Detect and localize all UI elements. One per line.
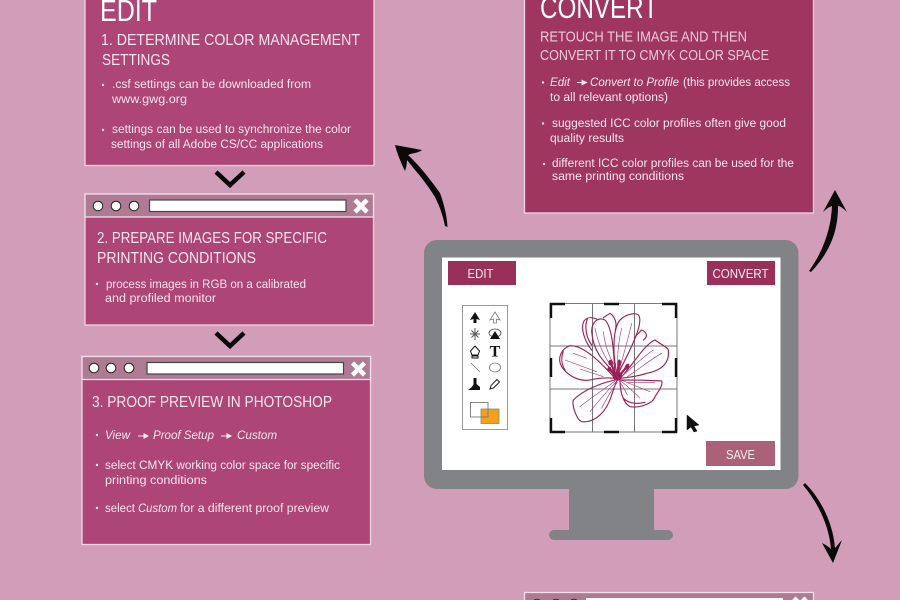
step 2 heading: 2. PREPARE IMAGES FOR SPECIFIC <box>97 230 327 247</box>
convert button <box>707 261 775 285</box>
convert subheading: CONVERT IT TO CMYK COLOR SPACE <box>540 47 769 64</box>
step 3 heading: 3. PROOF PREVIEW IN PHOTOSHOP <box>92 394 332 411</box>
icon: ellipse tool <box>490 363 500 372</box>
step 3 bullets <box>96 428 340 515</box>
toolbox panel <box>462 306 508 430</box>
window title bar <box>85 194 374 217</box>
arrow: chevron 2 to 3 <box>216 333 244 346</box>
step 3 bullets: Custom <box>237 428 277 442</box>
icon: pen tool <box>470 346 480 358</box>
step 2 bullet: and profiled monitor <box>105 291 216 305</box>
cursor <box>687 415 699 432</box>
icon: type tool: T <box>490 344 501 360</box>
panel: bottom window (cropped) <box>524 592 814 600</box>
convert bullets: suggested ICC color profiles often give good <box>552 116 786 130</box>
step 3 bullets: Custom <box>138 501 177 515</box>
monitor frame <box>424 240 798 489</box>
icon: brush tool <box>468 378 480 390</box>
step 3 bullets: select CMYK working color space for specific <box>105 458 340 472</box>
step 2 bullet: process images in RGB on a calibrated <box>106 277 306 291</box>
step 2 bullet <box>96 277 306 305</box>
convert bullets: same printing conditions <box>552 169 684 183</box>
icon: lasso <box>489 329 501 339</box>
arrow: chevron 1 to 2 <box>216 172 244 185</box>
step 1 bullets: settings can be used to synchronize the color <box>112 122 351 136</box>
step 1 bullets: www.gwg.org <box>111 92 187 106</box>
save button <box>706 441 775 466</box>
icon: pencil tool <box>490 380 500 389</box>
icon: selection arrow <box>470 312 480 323</box>
convert bullets: different ICC color profiles can be used for the <box>552 156 794 170</box>
panel: edit step 3 window <box>82 356 370 544</box>
icon: color swatches <box>470 402 499 424</box>
step 1 bullets: settings of all Adobe CS/CC applications <box>111 137 323 151</box>
icon: magic wand <box>470 328 480 340</box>
window title bar <box>82 356 370 380</box>
step 3 bullets: for a different proof preview <box>180 501 329 515</box>
icon: direct selection arrow <box>490 312 500 323</box>
monitor screen <box>442 258 780 470</box>
monitor stand <box>549 485 673 540</box>
arrow: monitor to convert <box>809 190 847 272</box>
panel: edit step 1 <box>85 0 374 166</box>
flower illustration <box>560 313 669 422</box>
panel: convert <box>524 0 814 213</box>
convert button: CONVERT <box>712 266 769 281</box>
step 3 bullets: printing conditions <box>105 473 207 487</box>
step 1 bullets <box>102 77 351 151</box>
step 1 heading: 1. DETERMINE COLOR MANAGEMENT <box>101 32 360 49</box>
step 2 heading: PRINTING CONDITIONS <box>97 250 256 267</box>
panel: edit step 2 window <box>85 194 374 325</box>
step 3 bullets: View <box>105 428 131 442</box>
monitor <box>424 240 798 540</box>
convert bullets: quality results <box>550 131 624 145</box>
convert subheading: RETOUCH THE IMAGE AND THEN <box>540 28 747 46</box>
save button: SAVE <box>726 447 755 462</box>
convert bullets: to all relevant options) <box>550 90 668 104</box>
step 1 bullets: .csf settings can be downloaded from <box>112 77 311 91</box>
edit button <box>448 261 516 285</box>
edit button: EDIT <box>468 266 494 281</box>
step 2 heading <box>97 230 327 267</box>
step 1 heading <box>101 32 360 69</box>
step 1 heading: SETTINGS <box>102 52 170 69</box>
convert bullets: Convert to Profile <box>590 75 679 89</box>
convert subheading <box>540 28 769 64</box>
arrow: monitor to save panel <box>803 483 842 563</box>
convert bullets: (this provides access <box>683 75 790 89</box>
step 3 bullets: select <box>105 501 136 515</box>
convert bullets <box>542 75 794 183</box>
arrow: monitor to edit <box>395 145 448 227</box>
convert bullets: Edit <box>550 75 571 89</box>
crop grid <box>550 304 677 432</box>
icon: line tool <box>471 363 480 372</box>
step 3 bullets: Proof Setup <box>153 428 214 442</box>
